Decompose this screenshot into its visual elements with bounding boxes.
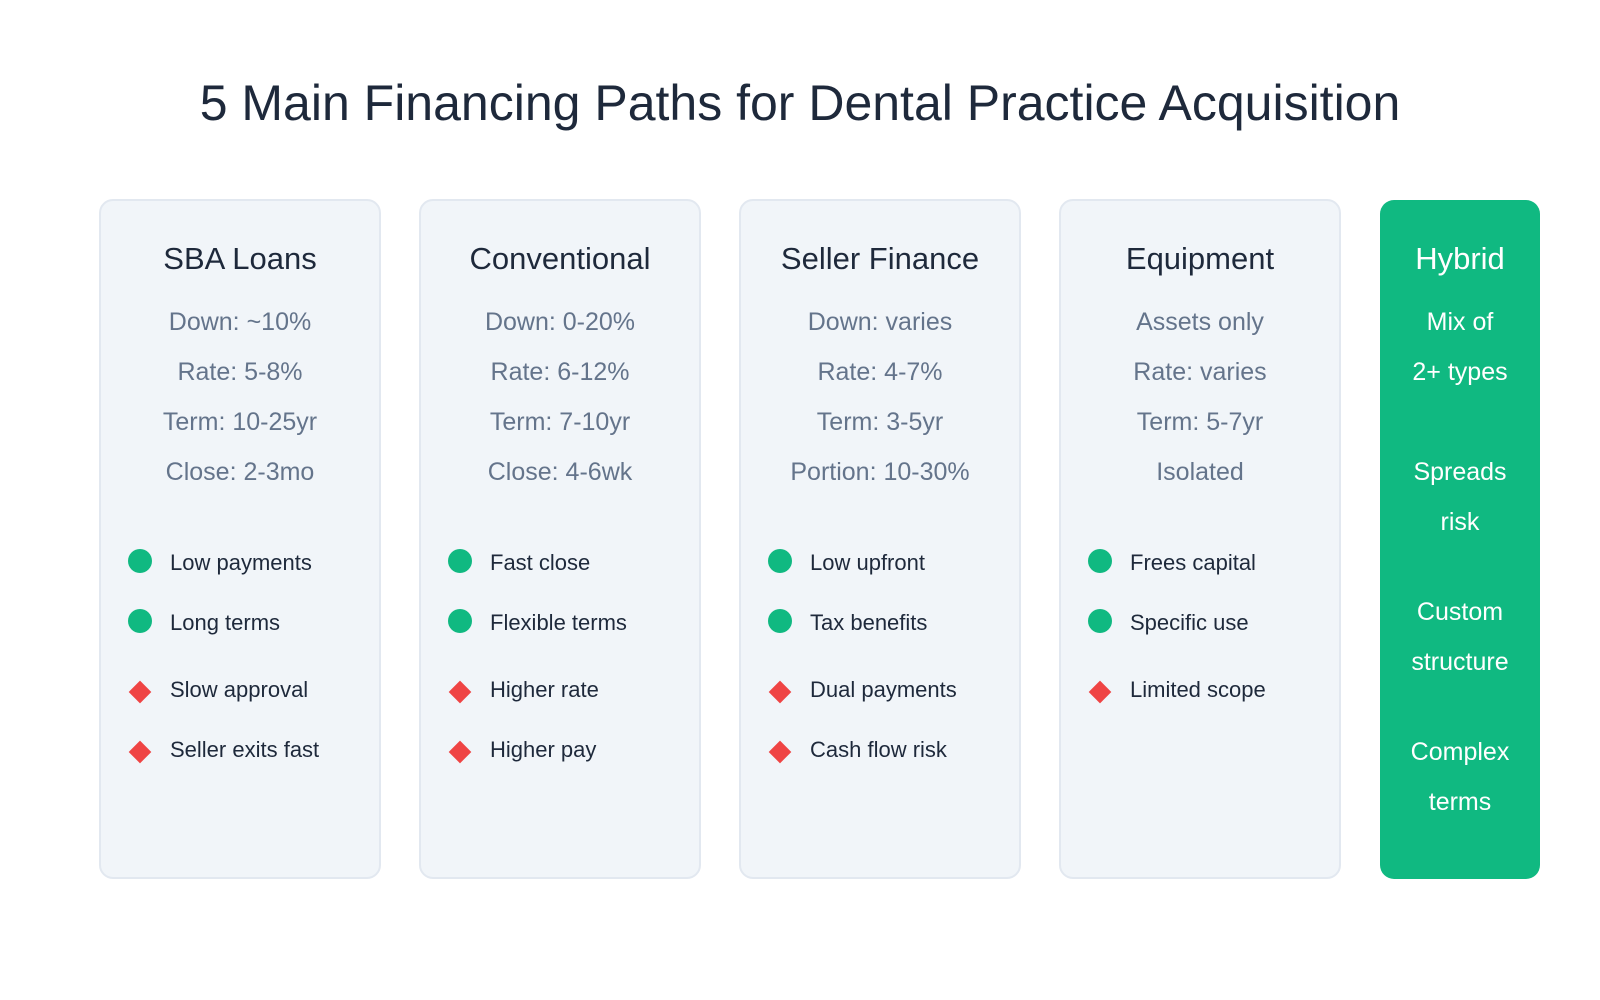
content: Seller Finance: Portion: 10-30% xyxy=(790,458,970,486)
panel: Hybrid: Complex xyxy=(1411,738,1509,766)
content: SBA Loans: Long terms xyxy=(170,610,280,635)
content: Equipment: Specific use xyxy=(1130,610,1249,635)
title: 5 Main Financing Paths for Dental Practice Acquisition xyxy=(200,75,1400,131)
content: SBA Loans: Close: 2-3mo xyxy=(166,458,314,486)
content: Conventional: Rate: 6-12% xyxy=(491,358,629,386)
panel: SBA Loans xyxy=(99,199,381,879)
panel: Seller Finance xyxy=(739,199,1021,879)
content: Equipment: Assets only xyxy=(1136,308,1264,336)
content: SBA Loans: Term: 10-25yr xyxy=(163,408,317,436)
content: SBA Loans xyxy=(128,241,319,764)
content: Seller Finance: Dual payments xyxy=(810,677,957,702)
content: Conventional: Down: 0-20% xyxy=(485,308,635,336)
content: Conventional: Higher pay xyxy=(490,737,596,762)
panel: Equipment xyxy=(1059,199,1341,879)
content: Conventional: Flexible terms xyxy=(490,610,627,635)
content: Conventional: Term: 7-10yr xyxy=(490,408,630,436)
content: Seller Finance xyxy=(768,241,979,764)
content: SBA Loans: Down: ~10% xyxy=(169,308,311,336)
content: Conventional: Conventional xyxy=(470,241,650,276)
content: Equipment: Term: 5-7yr xyxy=(1137,408,1263,436)
content: SBA Loans: Low payments xyxy=(170,550,312,575)
panel: Conventional xyxy=(419,199,701,879)
content: Seller Finance: Rate: 4-7% xyxy=(817,358,943,386)
content: Seller Finance: Term: 3-5yr xyxy=(817,408,943,436)
content: Equipment: Equipment xyxy=(1126,241,1274,276)
content: Conventional: Fast close xyxy=(490,550,590,575)
content: Conventional: Close: 4-6wk xyxy=(488,458,632,486)
content: Seller Finance: Cash flow risk xyxy=(810,737,947,762)
panel: Hybrid: 2+ types xyxy=(1412,358,1508,386)
content: SBA Loans: Slow approval xyxy=(170,677,308,702)
content: Seller Finance: Low upfront xyxy=(810,550,925,575)
content: Seller Finance: Seller Finance xyxy=(781,241,979,276)
content: SBA Loans: Rate: 5-8% xyxy=(177,358,303,386)
panel: Hybrid: terms xyxy=(1429,788,1491,816)
panel: Hybrid: risk xyxy=(1441,508,1479,536)
content: Equipment: Isolated xyxy=(1156,458,1244,486)
panel: Hybrid: Mix of xyxy=(1427,308,1493,336)
panel: Hybrid: structure xyxy=(1411,648,1509,676)
panel: Hybrid: Custom xyxy=(1417,598,1503,626)
panel: Hybrid: Spreads xyxy=(1413,458,1507,486)
panel: Hybrid xyxy=(1380,200,1540,879)
content: Seller Finance: Down: varies xyxy=(808,308,952,336)
panel: Hybrid: Hybrid xyxy=(1415,241,1505,276)
content: Equipment: Rate: varies xyxy=(1133,358,1267,386)
content: Seller Finance: Tax benefits xyxy=(810,610,927,635)
content: Equipment xyxy=(1088,241,1274,704)
content: Equipment: Limited scope xyxy=(1130,677,1266,702)
content: SBA Loans: Seller exits fast xyxy=(170,737,319,762)
content: Conventional: Higher rate xyxy=(490,677,599,702)
content: Conventional xyxy=(448,241,650,764)
content: SBA Loans: SBA Loans xyxy=(163,241,317,276)
content: Equipment: Frees capital xyxy=(1130,550,1256,575)
